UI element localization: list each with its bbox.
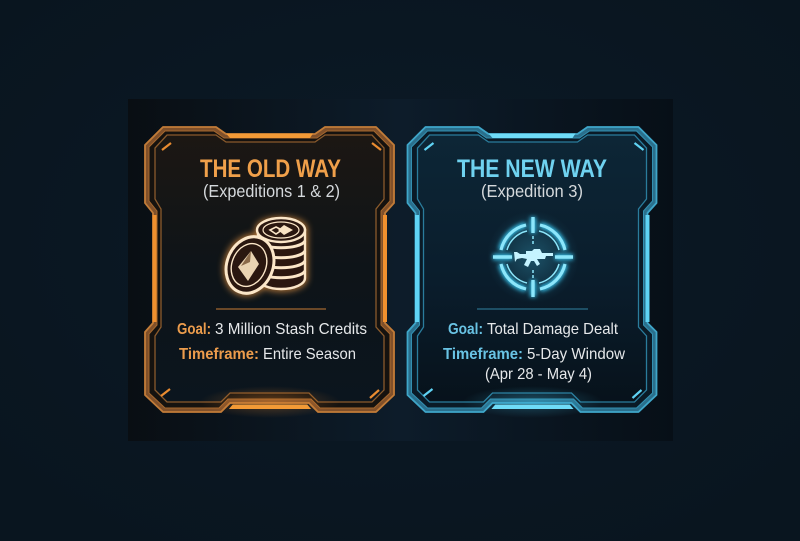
new way frame bbox=[408, 127, 656, 418]
panel: the old way bbox=[145, 127, 394, 418]
divider bbox=[477, 308, 588, 310]
top accent bar bbox=[488, 134, 576, 138]
goal label: Goal: bbox=[448, 321, 483, 338]
subheading: (Expedition 3) bbox=[481, 181, 583, 201]
bottom accent bar bbox=[492, 405, 572, 408]
top accent bar bbox=[226, 134, 313, 138]
timeframe label: Timeframe: bbox=[179, 346, 259, 363]
background panel bbox=[128, 99, 673, 441]
icon: coin stack bbox=[218, 218, 305, 301]
old way frame bbox=[145, 127, 394, 418]
bottom accent bar bbox=[230, 405, 310, 408]
heading: THE OLD WAY bbox=[200, 155, 341, 183]
goal value: Total Damage Dealt bbox=[487, 321, 619, 338]
timeframe value: 5-Day Window bbox=[527, 346, 625, 363]
date range: (Apr 28 - May 4) bbox=[485, 366, 592, 383]
goal label: Goal: bbox=[177, 321, 211, 338]
timeframe label: Timeframe: bbox=[443, 346, 523, 363]
panel: the new way bbox=[408, 127, 656, 418]
goal value: 3 Million Stash Credits bbox=[215, 321, 367, 338]
icon: crosshair with rifle bbox=[487, 211, 579, 303]
timeframe value: Entire Season bbox=[263, 346, 356, 363]
subheading: (Expeditions 1 & 2) bbox=[203, 181, 340, 201]
divider bbox=[216, 308, 326, 310]
heading: THE NEW WAY bbox=[457, 155, 607, 183]
